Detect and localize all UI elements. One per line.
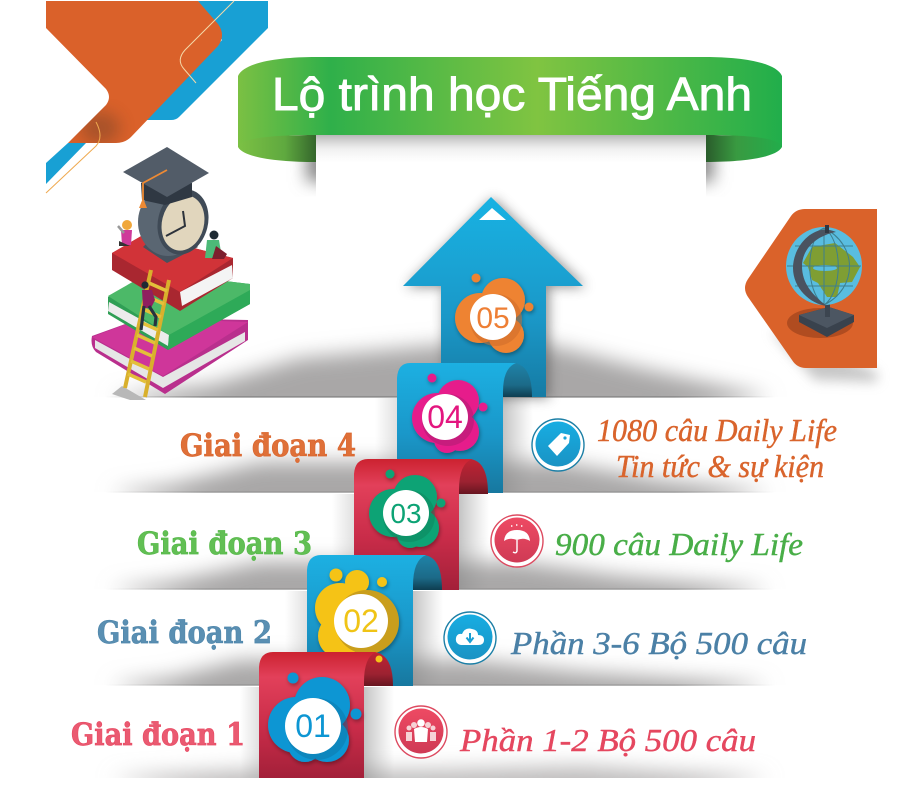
person reading bbox=[118, 220, 132, 246]
icon: umbrella bbox=[491, 515, 543, 567]
book stack with clock illustration bbox=[92, 147, 250, 400]
globe bbox=[786, 225, 862, 338]
icon: group of people bbox=[395, 706, 447, 758]
step 4 ribbon bbox=[397, 363, 532, 493]
label: stage 2: Giai đoạn 2 bbox=[97, 615, 272, 651]
corner decoration: orange and blue chevrons bbox=[46, 1, 268, 193]
badge 01: 01 bbox=[295, 708, 331, 744]
step bands background shading bbox=[105, 345, 775, 800]
step 3 ribbon bbox=[354, 459, 488, 590]
pink book bbox=[92, 318, 248, 394]
person sitting bbox=[205, 230, 227, 259]
step 2 ribbon bbox=[307, 555, 442, 686]
label: stage 4: Giai đoạn 4 bbox=[180, 428, 356, 464]
ribbon side shadows on bands bbox=[240, 398, 533, 778]
text: stage 4 content: 1080 câu Daily Life bbox=[597, 412, 837, 448]
title: Lộ trình học Tiếng Anh bbox=[272, 68, 752, 120]
step 1 ribbon bbox=[259, 652, 393, 778]
badge 05 bbox=[455, 274, 534, 353]
globe badge bbox=[745, 209, 877, 382]
text: stage 2 content: Phần 3-6 Bộ 500 câu bbox=[510, 625, 807, 661]
text: stage 3 content: 900 câu Daily Life bbox=[555, 526, 803, 562]
green book bbox=[108, 272, 250, 350]
badge 04: 04 bbox=[427, 399, 463, 435]
text: stage 4 content: Tin tức & sự kiện bbox=[616, 448, 824, 484]
label: stage 3: Giai đoạn 3 bbox=[137, 526, 312, 562]
red book bbox=[112, 235, 233, 311]
step 5 arrow bbox=[403, 197, 586, 398]
alarm clock bbox=[138, 184, 215, 263]
badge 02: 02 bbox=[343, 603, 379, 639]
graduation cap bbox=[123, 147, 209, 208]
banner shadow panel bbox=[306, 130, 714, 220]
badge 05: 05 bbox=[476, 302, 510, 335]
icon: cloud download bbox=[444, 612, 496, 664]
badge 03: 03 bbox=[390, 498, 422, 529]
label: stage 1: Giai đoạn 1 bbox=[71, 717, 245, 753]
icon: price tag bbox=[532, 419, 584, 471]
text: stage 1 content: Phần 1-2 Bộ 500 câu bbox=[459, 722, 756, 758]
ladder with climber bbox=[125, 270, 169, 397]
title ribbon bbox=[238, 57, 782, 162]
text: stage 4 content bbox=[597, 412, 837, 484]
